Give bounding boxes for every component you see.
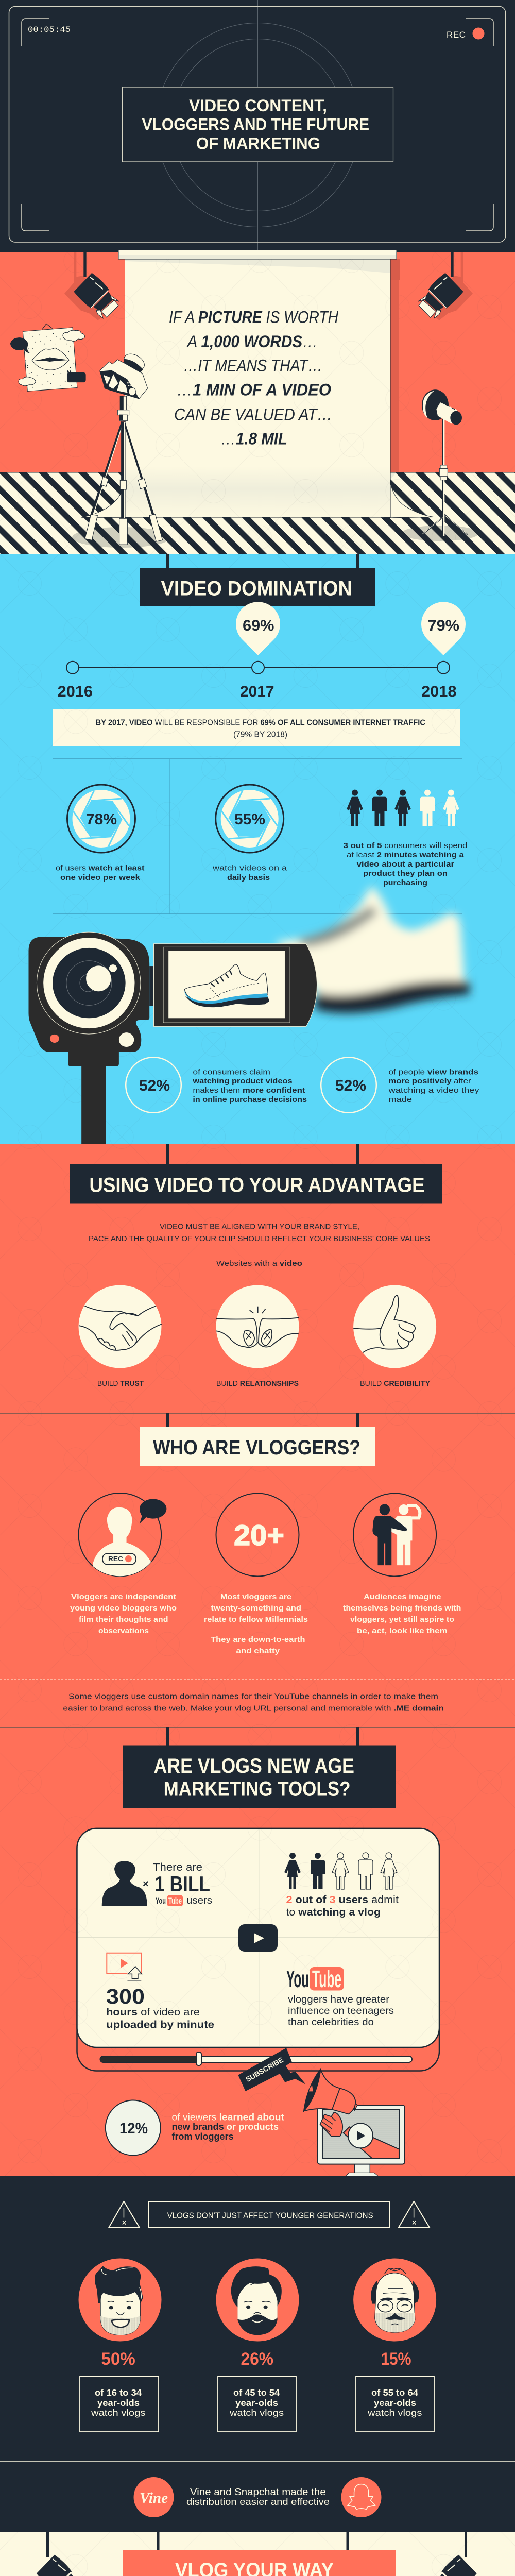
callout: vlogs don't just affect younger generations — [149, 2201, 389, 2228]
text: most vloggers are twenty-something: They are down-to-earth — [211, 1636, 305, 1644]
text: vine and snapchat: Vine and Snapchat made the — [190, 2487, 326, 2497]
icon: young face — [78, 2259, 162, 2341]
text: most vloggers are twenty-something: Most vloggers are — [220, 1593, 291, 1601]
stat column: 15% — [353, 2259, 436, 2432]
icon: 20+: 20+ — [234, 1519, 284, 1551]
panel: using video and vloggers — [0, 1144, 515, 2176]
pin: 69% — [236, 602, 280, 655]
stat: 2 out of 3 users: to watching a vlog — [286, 1907, 381, 1918]
timeline chart — [58, 602, 466, 700]
heading: who are vloggers: WHO ARE VLOGGERS? — [153, 1436, 360, 1459]
icon: two friends — [353, 1493, 436, 1577]
box: 45 to 54: of 45 to 54 — [233, 2387, 280, 2398]
stat: 12% of viewers: new brands or products — [172, 2122, 279, 2132]
banner: traffic statement: (79% BY 2018) — [233, 731, 287, 739]
box: 45 to 54 — [218, 2377, 296, 2432]
stat: 3 out of 5 consumers: at least 2 minutes watching a — [347, 851, 465, 859]
floor shadows — [72, 526, 479, 548]
stat: 3 out of 5 consumers — [343, 790, 468, 887]
camcorder flip screen — [153, 944, 317, 1026]
heading: are vlogs new age marketing tools: ARE VLOGS NEW AGE — [153, 1755, 354, 1777]
callout: vlogs don't just affect younger generations: VLOGS DON’T JUST AFFECT YOUNGER GENERATIONS — [167, 2211, 373, 2221]
icon: sneaker on screen — [184, 964, 269, 1007]
labels: build trust, relationships, credibility: BUILD CREDIBILITY — [360, 1379, 430, 1388]
slider — [100, 2052, 412, 2065]
text: vloggers are independent: young video bloggers who — [70, 1604, 177, 1613]
text: most vloggers are twenty-something — [204, 1593, 308, 1655]
labels: build trust, relationships, credibility — [97, 1379, 430, 1388]
banner: traffic statement — [53, 709, 460, 746]
backdrop paper screen — [81, 250, 434, 518]
icon: camcorder — [28, 932, 317, 1145]
stat column: 26% — [216, 2259, 299, 2432]
box: 16 to 34: watch vlogs — [91, 2408, 146, 2418]
stat: 78% — [56, 785, 145, 882]
stat: 52% brands — [321, 1057, 479, 1113]
stat: 1 bill users: × — [143, 1878, 149, 1890]
stat: 300 hours: hours of video are — [106, 2007, 200, 2018]
stat column: 50% — [78, 2259, 162, 2432]
icon: right spotlight — [431, 2532, 477, 2576]
icon: older face with glasses — [353, 2259, 436, 2341]
video player card — [77, 1828, 439, 2071]
stat: 12% of viewers: from vloggers — [172, 2131, 234, 2142]
stat: 3 out of 5 consumers: video about a particular — [357, 860, 454, 869]
text: audiences imagine: Audiences imagine — [364, 1593, 441, 1601]
icon: left spotlight — [64, 251, 119, 320]
text: custom domain note: easier to brand across the web. Make your vlog URL personal and memorable with .ME domain — [63, 1704, 444, 1713]
box: 16 to 34: year-olds — [97, 2398, 140, 2408]
quote on screen: …1 MIN OF A VIDEO — [177, 380, 331, 399]
logo: vine — [134, 2477, 174, 2517]
stat: 52% brands: 52% — [335, 1077, 366, 1094]
timecode: 00:05:45 — [28, 25, 71, 35]
stat: youtube vloggers — [286, 1965, 394, 2028]
icon: vlogger with rec: REC — [108, 1555, 124, 1563]
text: custom domain note: Some vloggers use custom domain names for their YouTube channels in order to make them — [68, 1692, 438, 1701]
text: most vloggers are twenty-something: relate to fellow Millennials — [204, 1616, 308, 1624]
viewfinder target circles — [0, 0, 515, 252]
text: vloggers are independent — [70, 1593, 177, 1635]
rec indicator: REC — [447, 30, 466, 40]
quote on screen: CAN BE VALUED AT… — [174, 405, 332, 423]
heading: video domination — [140, 554, 375, 606]
quote on screen: …IT MEANS THAT… — [183, 357, 322, 375]
stat column: 26%: 26% — [241, 2349, 273, 2369]
heading: using video to your advantage — [70, 1144, 442, 1204]
quote on screen: …1.8 MIL — [220, 430, 287, 448]
monitor — [318, 2105, 405, 2176]
timeline years: 2017 — [240, 683, 274, 700]
pin: 69%: 69% — [243, 617, 274, 634]
title box: VIDEO CONTENT, — [189, 96, 327, 115]
icon: left spotlight — [37, 2532, 82, 2576]
logo: youtube: Tube — [312, 1965, 341, 1992]
panel: photo studio scene — [0, 250, 515, 554]
stat: 52% brands: made — [388, 1095, 412, 1104]
icon: right spotlight — [418, 251, 473, 320]
stat: 52% confident: watching product videos — [192, 1077, 293, 1086]
box: 55 to 64 — [356, 2377, 434, 2432]
stat: 55%: daily basis — [227, 873, 270, 882]
panel: header viewfinder — [0, 0, 515, 252]
panel: vlog your way to success — [0, 2532, 515, 2576]
heading: vlog your way to success — [123, 2532, 396, 2576]
heading: are vlogs new age marketing tools — [123, 1727, 396, 1808]
heading: are vlogs new age marketing tools: MARKETING TOOLS? — [164, 1777, 350, 1800]
quote on screen — [169, 308, 339, 448]
stat: 55%: 55% — [234, 811, 265, 828]
text: vloggers are independent: Vloggers are independent — [71, 1593, 176, 1601]
panel: video domination — [0, 554, 515, 1145]
box: 16 to 34 — [80, 2377, 159, 2432]
stat: 2 out of 3 users: 2 out of 3 users admit — [286, 1894, 399, 1906]
stat: 78%: one video per week — [60, 873, 141, 882]
icon: play button — [238, 1924, 278, 1952]
text: audiences imagine: themselves being friends with — [343, 1604, 461, 1613]
stat: 1 bill users: You — [156, 1896, 166, 1906]
labels: build trust, relationships, credibility: BUILD TRUST — [97, 1379, 144, 1388]
stat: 52% confident: makes them more confident — [193, 1086, 305, 1095]
icon: upload video — [107, 1953, 142, 1981]
text: custom domain note — [63, 1692, 444, 1713]
stat: 1 bill users: users — [186, 1895, 212, 1906]
stat: 1 bill users: Tube — [168, 1896, 182, 1906]
icon: handshake — [78, 1285, 162, 1368]
intro text — [89, 1222, 430, 1268]
speech tag: subscribe — [238, 2048, 306, 2091]
text: audiences imagine: be, act, look like them — [357, 1627, 448, 1635]
intro text: Websites with a video — [216, 1259, 302, 1268]
timeline years: 2016 — [58, 683, 93, 700]
intro text: VIDEO MUST BE ALIGNED WITH YOUR BRAND STYLE, — [160, 1222, 359, 1231]
stat: 55% — [212, 785, 287, 882]
icon: blurred sneaker — [276, 887, 470, 1013]
logo: snapchat ghost — [341, 2477, 381, 2517]
logo: youtube: You — [286, 1965, 309, 1992]
stat: 3 out of 5 consumers: 3 out of 5 consumers will spend — [343, 841, 468, 850]
stat: 12% of viewers: of viewers learned about — [172, 2112, 284, 2123]
stat: youtube vloggers: than celebrities do — [288, 2017, 374, 2028]
box: 55 to 64: year-olds — [374, 2398, 416, 2408]
tripod legs — [85, 422, 163, 545]
stat column: 50%: 50% — [101, 2349, 135, 2369]
camera body — [100, 351, 148, 399]
icon: play circle — [348, 2123, 373, 2148]
heading: using video to your advantage: USING VIDEO TO YOUR ADVANTAGE — [90, 1174, 424, 1196]
icon: 20+ — [216, 1493, 299, 1577]
icon: poster with lips — [10, 324, 86, 391]
stat: 12% of viewers: 12% — [119, 2120, 148, 2137]
text: audiences imagine — [343, 1593, 461, 1635]
heading: video domination: VIDEO DOMINATION — [161, 577, 352, 600]
text: most vloggers are twenty-something: twenty-something and — [211, 1604, 301, 1613]
pin: 79% — [421, 602, 466, 655]
stat: 52% brands: watching a video they — [388, 1086, 479, 1095]
speech tag: subscribe: SUBSCRIBE — [244, 2056, 285, 2083]
stat: 1 bill users — [102, 1861, 212, 1906]
quote on screen: IF A PICTURE IS WORTH — [169, 308, 339, 327]
icon: camera on tripod — [85, 351, 163, 545]
stat: 55%: watch videos on a — [212, 863, 287, 873]
box: 45 to 54: year-olds — [235, 2398, 278, 2408]
icon: vlogger with rec — [78, 1493, 166, 1580]
icon: people row — [284, 1853, 397, 1889]
icon: fist bump — [216, 1285, 299, 1368]
stat: 52% confident: of consumers claim — [193, 1067, 270, 1077]
stat: 2 out of 3 users — [284, 1853, 399, 1918]
camcorder body — [28, 937, 149, 1052]
stat: 52% confident: in online purchase decisions — [193, 1095, 307, 1104]
icon: warning triangle right — [399, 2201, 430, 2228]
stat: 52% brands: more positively after — [388, 1077, 471, 1086]
viewfinder frame — [9, 6, 506, 242]
banner: traffic statement: BY 2017, VIDEO WILL BE RESPONSIBLE FOR 69% OF ALL CONSUMER INTERNET TRAFFIC — [96, 718, 425, 727]
labels: build trust, relationships, credibility: BUILD RELATIONSHIPS — [216, 1379, 299, 1388]
stat column: 15%: 15% — [381, 2349, 411, 2369]
stat: 300 hours: uploaded by minute — [106, 2020, 214, 2031]
quote on screen: A 1,000 WORDS… — [186, 332, 318, 351]
text: most vloggers are twenty-something: and chatty — [236, 1647, 280, 1655]
stat: 1 bill users: There are — [153, 1861, 202, 1873]
stat: 300 hours: 300 — [106, 1985, 145, 2008]
icon: five people — [347, 790, 459, 826]
camcorder lens — [37, 932, 141, 1034]
text: vine and snapchat: distribution easier and effective — [186, 2497, 330, 2507]
text: audiences imagine: vloggers, yet still aspire to — [350, 1616, 454, 1624]
stat: 78%: of users watch at least — [56, 863, 145, 873]
heading: who are vloggers — [140, 1413, 375, 1466]
stat: 78%: 78% — [86, 811, 117, 828]
icon: bearded face — [216, 2259, 299, 2341]
panel: vlogs and generations — [0, 2176, 515, 2532]
icon: user silhouette — [102, 1861, 147, 1906]
backdrop shadow on wall — [390, 259, 400, 472]
stat: 3 out of 5 consumers: purchasing — [383, 878, 427, 887]
stat: 52% confident — [126, 1057, 307, 1113]
rec indicator — [447, 28, 484, 40]
stat: 3 out of 5 consumers: product they plan on — [363, 869, 448, 878]
icon: thumbs up — [353, 1285, 436, 1368]
icon: warning triangle left — [109, 2201, 140, 2228]
stat: 300 hours — [106, 1953, 214, 2031]
logo: vine: Vine — [140, 2489, 168, 2506]
title box: VLOGGERS AND THE FUTURE — [142, 115, 369, 134]
stat: 12% of viewers — [106, 2100, 284, 2156]
stat: 52% confident: 52% — [139, 1077, 170, 1094]
illustration: monitor and megaphone — [238, 2048, 405, 2176]
icon: studio lamp on stand — [422, 389, 468, 536]
box: 16 to 34: of 16 to 34 — [95, 2387, 142, 2398]
stat: 1 bill users: 1 BILL — [154, 1872, 210, 1896]
text: vloggers are independent: observations — [98, 1627, 149, 1635]
box: 45 to 54: watch vlogs — [229, 2408, 284, 2418]
icon: megaphone — [304, 2069, 357, 2137]
stat: youtube vloggers: vloggers have greater — [288, 1994, 390, 2005]
box: 55 to 64: of 55 to 64 — [371, 2387, 418, 2398]
intro text: PACE AND THE QUALITY OF YOUR CLIP SHOULD REFLECT YOUR BUSINESS’ CORE VALUES — [89, 1234, 430, 1243]
stats grid lines — [53, 759, 462, 914]
stat: 52% brands: of people view brands — [388, 1067, 478, 1077]
box: 55 to 64: watch vlogs — [367, 2408, 422, 2418]
timeline years: 2018 — [421, 683, 456, 700]
stat: youtube vloggers: influence on teenagers — [288, 2006, 394, 2016]
camcorder stalk — [81, 1064, 106, 1145]
title box: OF MARKETING — [196, 134, 320, 152]
pin: 79%: 79% — [427, 617, 459, 634]
text: vloggers are independent: film their thoughts and — [79, 1616, 168, 1624]
text: vine and snapchat — [186, 2487, 330, 2507]
title box — [123, 87, 393, 162]
timeline years — [58, 683, 457, 700]
